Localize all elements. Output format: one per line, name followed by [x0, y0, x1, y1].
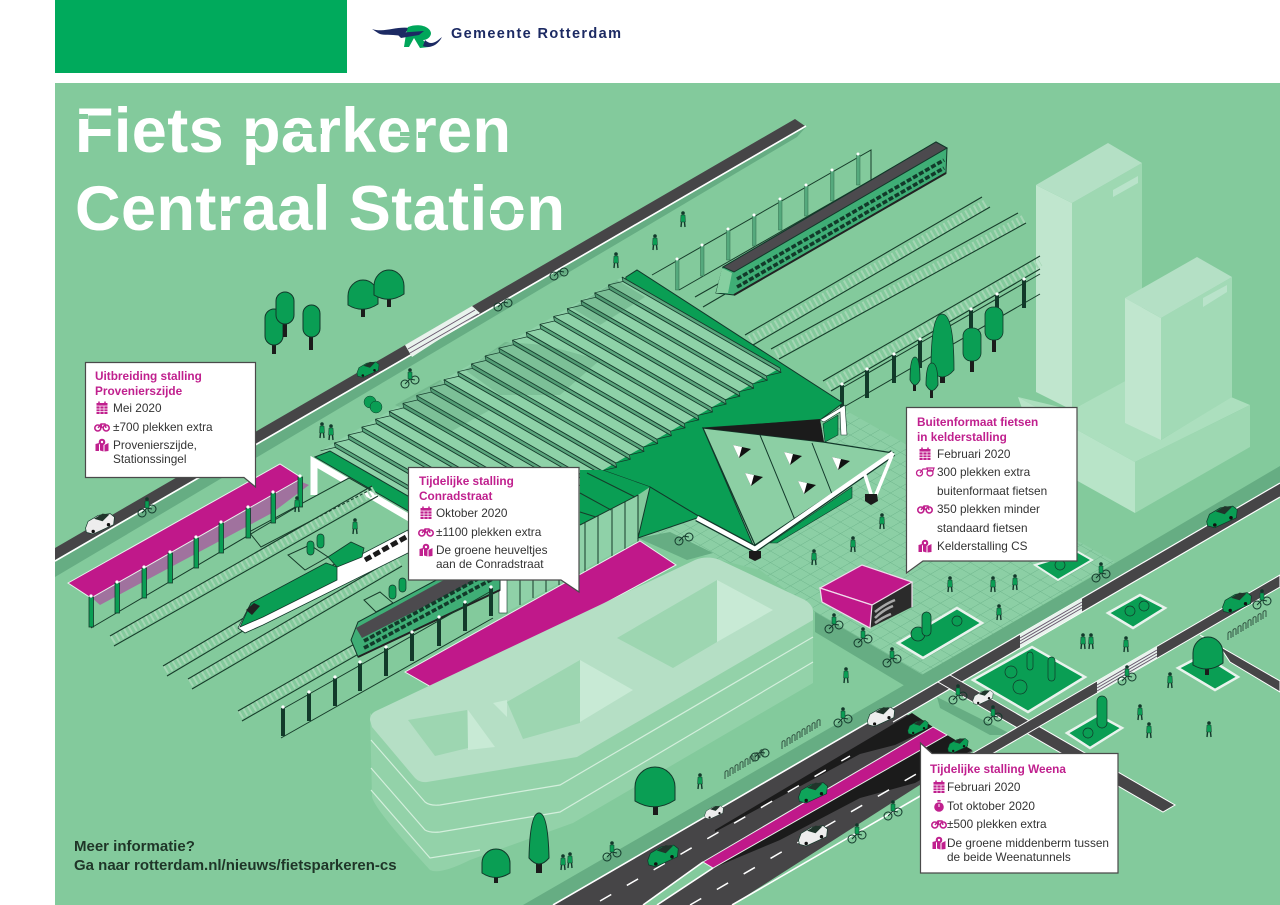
- planters: [898, 552, 1238, 748]
- station roof base: [602, 270, 843, 545]
- callout: Tijdelijke stalling Weena: Tot oktober 2020: [947, 799, 1035, 813]
- callout: Buitenformaat fietsen in kelderstalling: Kelderstalling CS: [937, 539, 1028, 553]
- callout: Tijdelijke stalling Weena: Tijdelijke stalling Weena: [930, 762, 1066, 776]
- magenta median, Weena: [703, 727, 947, 868]
- logo: Gemeente Rotterdam: [372, 25, 621, 48]
- callout: Uitbreiding stalling Provenierszijde: Mei 2020: [113, 401, 162, 415]
- callout: Buitenformaat fietsen in kelderstalling: in kelderstalling: [917, 430, 1007, 444]
- upper fence: [652, 150, 871, 290]
- building sides: [370, 607, 813, 871]
- entrance frame right of roof: [820, 405, 847, 442]
- footer: more information: Ga naar rotterdam.nl/nieuws/fietsparkeren-cs: [74, 857, 397, 874]
- pedestrians: [295, 211, 1211, 870]
- callout: Tijdelijke stalling Conradstraat: De groene heuveltjes: [436, 543, 548, 557]
- callout: Buitenformaat fietsen in kelderstalling: Buitenformaat fietsen: [917, 415, 1038, 429]
- upper right tracks: [695, 197, 1040, 391]
- fence posts, lower platform: [281, 585, 493, 738]
- magenta platform, Conradstraat: [405, 541, 676, 692]
- plaza grid: [640, 410, 1115, 675]
- green steps at roof end: [580, 470, 650, 525]
- road A: [938, 675, 1175, 812]
- planter 6 with tree: [1178, 637, 1238, 690]
- magenta platform, left (Provenierszijde): [68, 464, 302, 598]
- plaza edge strip: [815, 612, 923, 686]
- white canopy edge lower-left: [697, 453, 893, 549]
- callout: Uitbreiding stalling Provenierszijde: Stationssingel: [113, 452, 186, 466]
- podium: [1018, 380, 1250, 513]
- dark strip along main road: [523, 466, 1280, 905]
- callout: Tijdelijke stalling Weena: de beide Weenatunnels: [947, 850, 1071, 864]
- callout: Buitenformaat fietsen in kelderstalling: Februari 2020: [937, 447, 1011, 461]
- triangular canopy: [697, 419, 893, 561]
- strip along side road: [937, 697, 1013, 735]
- arch: white station frame: [314, 462, 507, 613]
- footer: more information: [74, 838, 397, 874]
- tower 1: [1036, 143, 1142, 410]
- callout: Tijdelijke stalling Conradstraat: [408, 468, 579, 592]
- tower 2: [1125, 257, 1232, 440]
- small trees between tracks: [307, 534, 406, 599]
- right fence: [840, 274, 1040, 413]
- main road: carriageways: [553, 708, 973, 905]
- trees: right of station: [910, 307, 1003, 398]
- planter 4: [1108, 595, 1165, 628]
- magenta entrance box: [820, 565, 912, 628]
- callout: Buitenformaat fietsen in kelderstalling: [906, 408, 1077, 573]
- bushes: [364, 396, 382, 413]
- strip beneath green triangle: [638, 532, 713, 560]
- narrow road: [893, 483, 1280, 722]
- callout: Buitenformaat fietsen in kelderstalling: standaard fietsen: [937, 521, 1028, 535]
- planter 2: [898, 608, 982, 658]
- planter 3: [973, 647, 1085, 712]
- cyclists: [138, 268, 1271, 861]
- planter 5: [1067, 696, 1122, 748]
- bullet train: [238, 530, 410, 633]
- road C: [1200, 635, 1280, 692]
- header: green block: [55, 0, 347, 73]
- callout: Tijdelijke stalling Weena: ±500 plekken extra: [947, 817, 1047, 831]
- callout: Buitenformaat fietsen in kelderstalling: buitenformaat fietsen: [937, 484, 1047, 498]
- logo mark: [372, 25, 442, 48]
- callout: Uitbreiding stalling Provenierszijde: Provenierszijde: [95, 384, 183, 398]
- skylights: [733, 445, 850, 494]
- callout: Tijdelijke stalling Conradstraat: Tijdelijke stalling: [419, 474, 514, 488]
- road B: [973, 575, 1280, 765]
- title: [75, 96, 565, 244]
- glass wall: [505, 495, 638, 613]
- left tracks: [110, 486, 402, 722]
- terraced building: [370, 558, 813, 871]
- callout: Uitbreiding stalling Provenierszijde: ±700 plekken extra: [113, 420, 213, 434]
- magenta platform shadow, left: [91, 480, 309, 605]
- planter 1: [1035, 552, 1092, 580]
- double-decker train, upper: [716, 142, 947, 295]
- callout: Tijdelijke stalling Weena: [920, 743, 1118, 873]
- title: Fiets parkeren: [75, 96, 511, 166]
- callout: Uitbreiding stalling Provenierszijde: [86, 362, 256, 487]
- title: Centraal Station: [75, 174, 565, 244]
- callout: Uitbreiding stalling Provenierszijde: Provenierszijde,: [113, 438, 197, 452]
- green front triangle: [638, 487, 700, 538]
- bike racks: [725, 611, 1266, 779]
- corrugated roof: [320, 276, 782, 495]
- glazed strip under canopy: [770, 487, 852, 543]
- towers in background: [1018, 143, 1250, 513]
- callout: Tijdelijke stalling Weena: Februari 2020: [947, 780, 1021, 794]
- cars: [86, 362, 1251, 867]
- footer: more information: Meer informatie?: [74, 838, 195, 855]
- left platform slabs: [249, 478, 393, 612]
- callout: Buitenformaat fietsen in kelderstalling: 350 plekken minder: [937, 502, 1040, 516]
- callout: Tijdelijke stalling Conradstraat: aan de Conradstraat: [436, 557, 544, 571]
- double-decker train, lower: [350, 580, 500, 658]
- left end of station: roof band: [314, 450, 408, 512]
- callout: Tijdelijke stalling Conradstraat: ±1100 plekken extra: [436, 525, 542, 539]
- trees: top left group: [265, 270, 404, 354]
- callout: Uitbreiding stalling Provenierszijde: Uitbreiding stalling: [95, 369, 202, 383]
- courtyards: [408, 580, 773, 756]
- black shadow wedge: [703, 419, 824, 442]
- trees: bottom: [482, 767, 675, 883]
- callout: Tijdelijke stalling Weena: De groene middenberm tussen: [947, 836, 1109, 850]
- fence posts, left platform: [89, 474, 302, 628]
- callout: Tijdelijke stalling Conradstraat: Conradstraat: [419, 489, 492, 503]
- upper road: [55, 119, 806, 577]
- terrace lines: [371, 637, 813, 858]
- logo wordmark: Gemeente Rotterdam: [451, 26, 621, 42]
- callout: Buitenformaat fietsen in kelderstalling: 300 plekken extra: [937, 465, 1031, 479]
- roof deck: [370, 558, 813, 782]
- callout: Tijdelijke stalling Conradstraat: Oktober 2020: [436, 506, 508, 520]
